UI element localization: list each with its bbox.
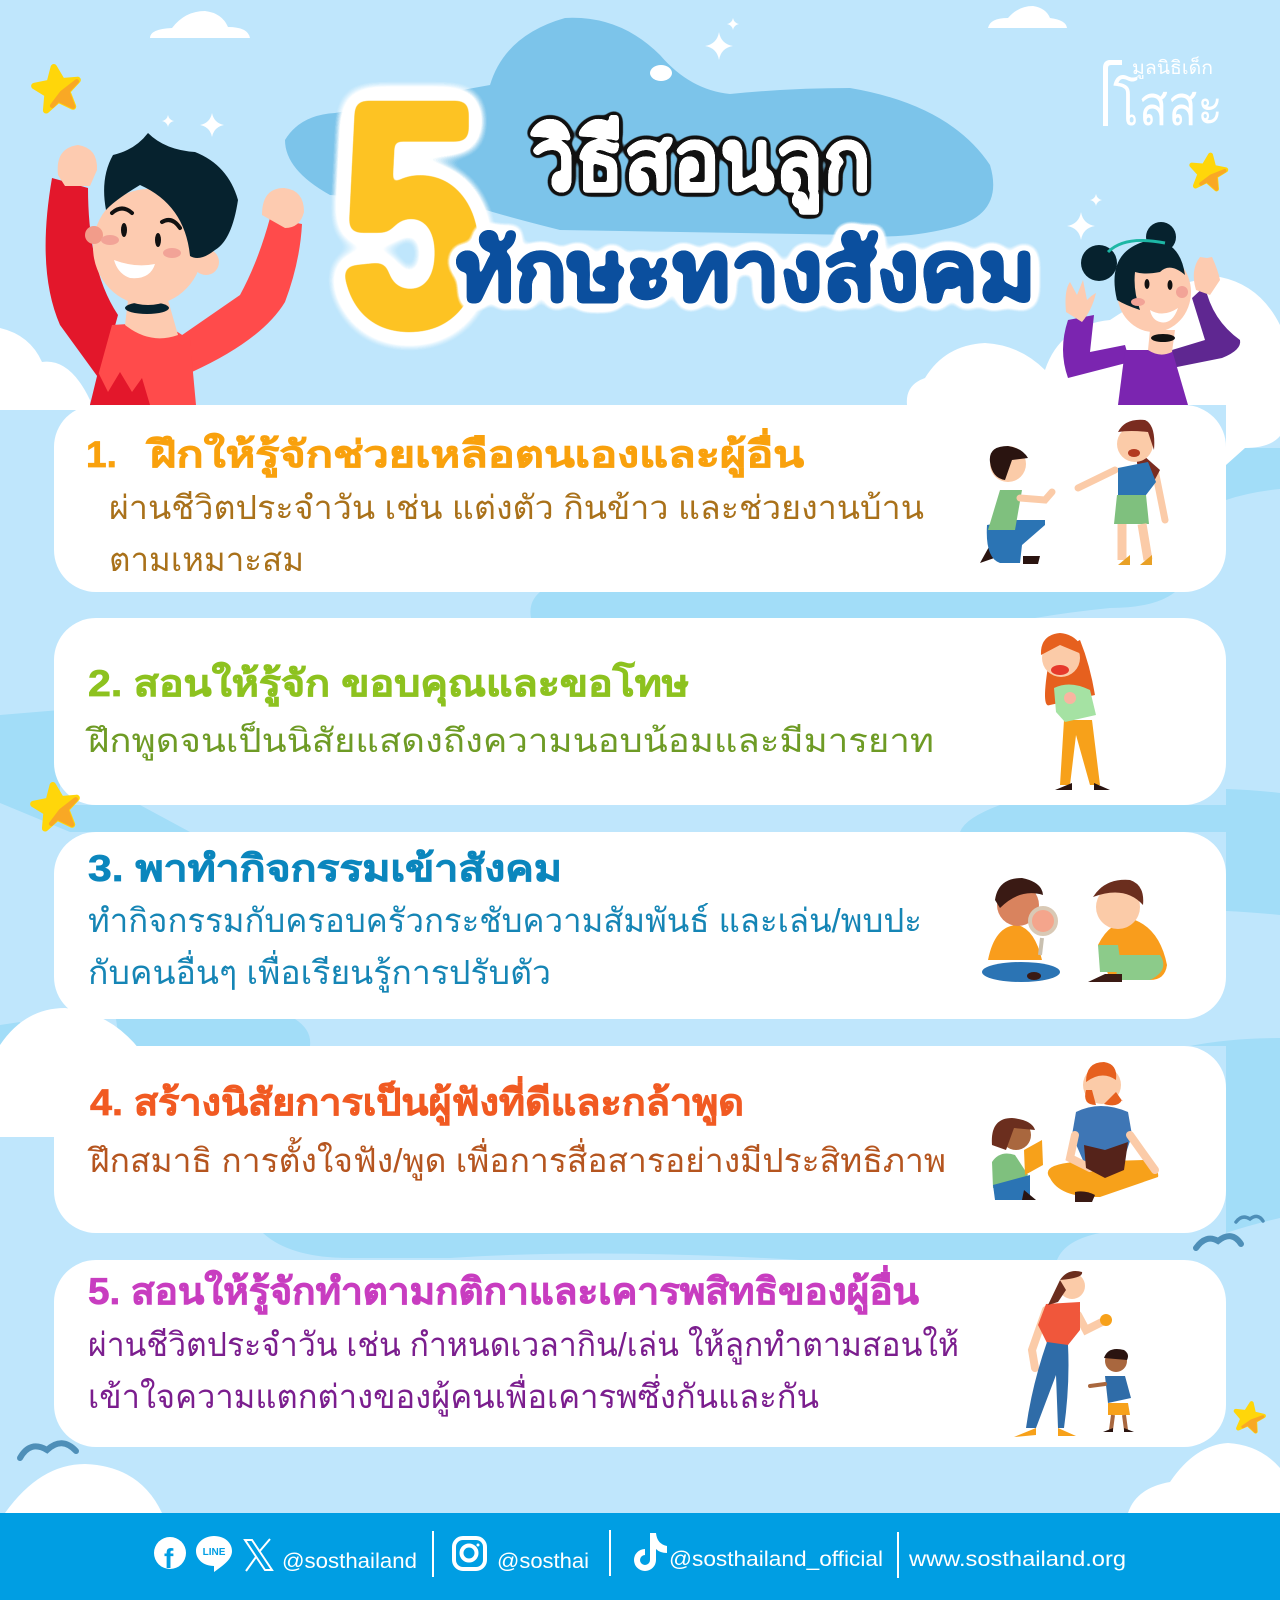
panel: item 4 — [54, 1046, 1226, 1233]
item 5 heading: 5. สอนให้รู้จักทำตามกติกาและเคารพสิทธิของผู้อื่น — [88, 1265, 919, 1315]
icon: facebook — [154, 1537, 186, 1574]
illustration: mother showing clock to child — [1014, 1271, 1134, 1437]
cloud: top left — [150, 11, 250, 38]
icon: star top right — [1189, 153, 1227, 190]
cloud: behind girl, right side — [907, 277, 1280, 465]
item 5 body — [88, 1326, 959, 1417]
item 1 body — [109, 489, 924, 578]
item 3 body: กับคนอื่นๆ เพื่อเรียนรู้การปรับตัว — [88, 950, 551, 993]
logo — [1103, 55, 1223, 137]
item 5 body: เข้าใจความแตกต่างของผู้คนเพื่อเคารพซึ่งกันและกัน — [88, 1374, 819, 1417]
logo: โสสะ — [1113, 74, 1223, 137]
icon: birds right — [1196, 1216, 1263, 1248]
cloud: left middle — [0, 1008, 140, 1137]
panel: item 5 — [54, 1260, 1226, 1447]
illustration: cheering boy — [46, 133, 304, 405]
footer handle: sosthai: @sosthai — [497, 1549, 589, 1573]
footer bar — [0, 1513, 1280, 1600]
icon: star left middle — [31, 782, 80, 829]
illustration: boy kneeling and girl pointing — [980, 420, 1165, 565]
icon: sparkles — [162, 18, 1102, 240]
item 1 body: ตามเหมาะสม — [109, 541, 304, 578]
item 1 body: ผ่านชีวิตประจำวัน เช่น แต่งตัว กินข้าว และช่วยงานบ้าน — [109, 489, 924, 526]
item 5 body: ผ่านชีวิตประจำวัน เช่น กำหนดเวลากิน/เล่น ให้ลูกทำตามสอนให้ — [88, 1326, 959, 1365]
panel: item 3 — [54, 832, 1226, 1019]
item 2 body: ฝึกพูดจนเป็นนิสัยแสดงถึงความนอบน้อมและมีมารยาท — [84, 721, 934, 761]
icon: instagram — [454, 1538, 485, 1569]
cloud: bottom left — [5, 1464, 162, 1513]
item 3 heading: 3. พาทำกิจกรรมเข้าสังคม — [88, 848, 562, 889]
icon: bird left — [20, 1443, 76, 1458]
icon: star top left — [32, 64, 81, 111]
item 1 heading — [86, 428, 804, 478]
icon: tiktok — [634, 1533, 667, 1571]
cloud: left of boy — [0, 328, 90, 410]
decorative blob behind title — [285, 18, 993, 236]
title number 5: 5 — [340, 35, 482, 393]
item 3 body — [88, 902, 922, 993]
icon: LINE: LINE — [203, 1547, 226, 1558]
icon: star bottom right — [1233, 1401, 1266, 1432]
title line 2: ทักษะทางสังคม — [456, 224, 1036, 318]
illustration: girl with hands on chest — [1041, 633, 1110, 790]
item 3 body: ทำกิจกรรมกับครอบครัวกระชับความสัมพันธ์ และเล่น/พบปะ — [88, 902, 922, 939]
footer website: www.sosthailand.org — [908, 1547, 1126, 1571]
item 1 heading: 1. — [86, 434, 117, 475]
item 4 heading: 4. สร้างนิสัยการเป็นผู้ฟังที่ดีและกล้าพูด — [90, 1076, 744, 1126]
item 2 heading: 2. สอนให้รู้จัก ขอบคุณและขอโทษ — [88, 661, 689, 707]
icon: facebook: f — [164, 1543, 174, 1574]
logo: มูลนิธิเด็ก — [1132, 55, 1213, 79]
cloud: top right — [988, 6, 1067, 28]
item 4 body: ฝึกสมาธิ การตั้งใจฟัง/พูด เพื่อการสื่อสารอย่างมีประสิทธิภาพ — [87, 1137, 946, 1181]
illustration: two seated boys — [982, 878, 1167, 982]
item 1 heading: ฝึกให้รู้จักช่วยเหลือตนเองและผู้อื่น — [145, 428, 804, 478]
panel: item 1 — [54, 405, 1226, 592]
footer handle: tiktok: @sosthailand_official — [669, 1547, 883, 1571]
footer handle: sosthailand: @sosthailand — [282, 1549, 417, 1573]
illustration: girl with raised hands — [1063, 222, 1240, 405]
title line 1: วิธีสอนลูก — [529, 113, 871, 214]
icon: LINE — [196, 1536, 232, 1572]
cloud: bottom right — [1128, 1443, 1280, 1513]
illustration: teacher reading with child — [992, 1062, 1158, 1202]
icon: X — [245, 1539, 272, 1571]
panel: item 2 — [54, 618, 1226, 805]
